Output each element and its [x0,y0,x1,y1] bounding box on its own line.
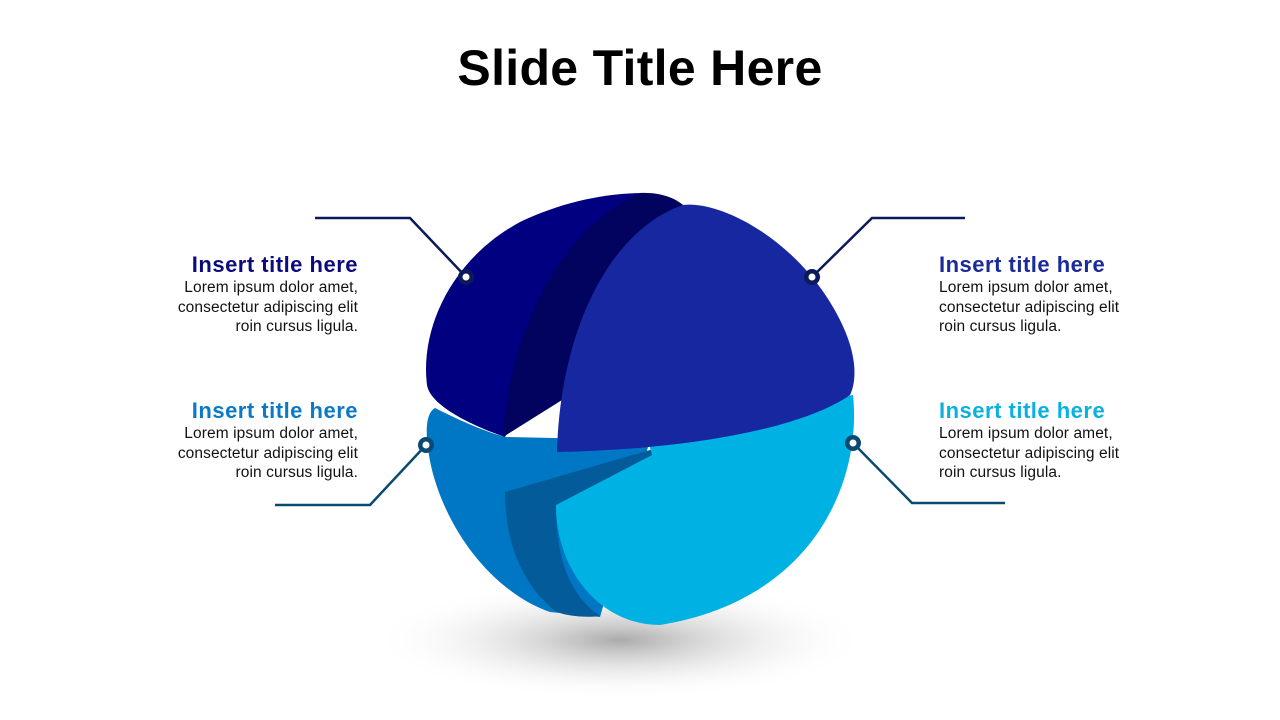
text: top left [178,252,358,335]
upper dark band [503,193,683,437]
text: top right: Lorem ipsum dolor amet, [939,279,1113,296]
text: bottom left: Lorem ipsum dolor amet, [184,425,358,442]
text: bottom right: roin cursus ligula. [939,464,1062,481]
text: bottom right: consectetur adipiscing elit [939,444,1119,462]
text: bottom left [178,398,358,481]
lower-left segment [427,408,650,617]
text: bottom left: Insert title here [192,398,358,423]
text: bottom left: consectetur adipiscing elit [178,444,358,462]
text: bottom left: roin cursus ligula. [235,464,358,481]
text: top right: Insert title here [939,252,1105,277]
text: bottom right: Lorem ipsum dolor amet, [939,425,1113,442]
text: top left: consectetur adipiscing elit [178,298,358,316]
text: top left: Insert title here [192,252,358,277]
upper-left navy segment [426,193,640,437]
text: top right: roin cursus ligula. [939,318,1062,335]
text: top right [939,252,1119,335]
text: top left: roin cursus ligula. [235,318,358,335]
connector lines [315,218,466,277]
markers [418,269,861,453]
text: top right: consectetur adipiscing elit [939,298,1119,316]
shadow [370,580,870,700]
text: bottom right [939,398,1119,481]
lower-right cyan segment [556,395,854,625]
upper-right blue segment [557,205,854,452]
title: Slide Title Here [457,40,823,96]
text: top left: Lorem ipsum dolor amet, [184,279,358,296]
text: bottom right: Insert title here [939,398,1105,423]
lower dark band [505,450,700,617]
